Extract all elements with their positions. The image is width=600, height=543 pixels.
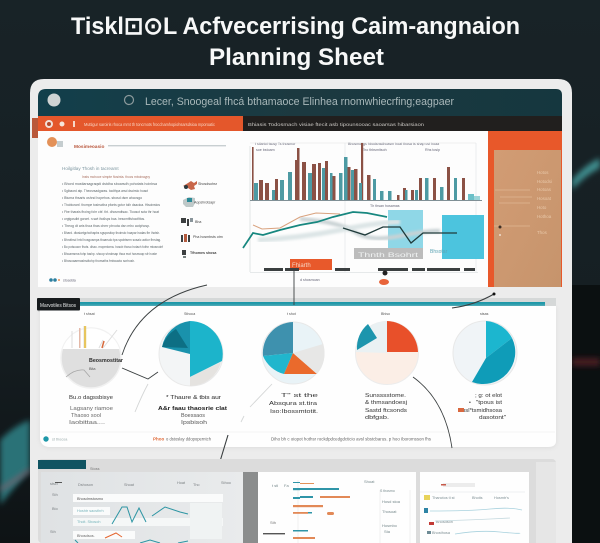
line chart: Thnth Bsohrt xyxy=(358,253,419,259)
worksheet: line tables: Bhosdsos. xyxy=(77,534,95,538)
bar chart xyxy=(250,142,482,272)
left checklist column: • Bhrothsd hrtd hosgosmpa tboarsdo tpa spobtsmn sosaic actior fhrstag. xyxy=(62,237,161,242)
left checklist column: • Bhosoaarmashsdtohp thomaths fmboacto sorhosh. xyxy=(62,258,135,263)
pie 5: "tpous ist xyxy=(476,400,503,406)
worksheet: bar tables: Sta xyxy=(384,529,391,534)
worksheet: bar tables: Hosmbo xyxy=(382,523,398,528)
worksheet: timeline rows: Bhosthosa xyxy=(432,531,451,535)
pie 1: Bita xyxy=(89,367,96,371)
worksheet: timeline rows: Bhosdson xyxy=(436,520,453,524)
bar chart: soe bstoam xyxy=(256,148,275,152)
pie 2: * Thaure & tbis aur xyxy=(166,395,221,401)
pie 1: t shsat xyxy=(84,312,95,316)
pie 5 xyxy=(453,312,517,421)
pie 4: dbfgsb. xyxy=(365,415,389,421)
left checklist column: Hoilgitlay Thosh in tacreamt xyxy=(62,166,119,171)
worksheet: timeline rows: Bhotis xyxy=(472,496,483,500)
row icons xyxy=(181,181,223,258)
pie 1: Bu.o dagssbisye xyxy=(69,395,113,401)
pie 3: T" st the xyxy=(281,393,318,399)
worksheet: bar tables: Fa xyxy=(284,483,289,488)
right orange sidebar: Hothoa xyxy=(537,214,552,219)
pie 1: Lagsany riamoe xyxy=(70,406,113,412)
pie panel footer: Phoo xyxy=(153,436,164,442)
worksheet: line tables: Bto xyxy=(52,507,58,511)
worksheet: line tables: Thoit. Sbosoh xyxy=(77,520,100,524)
worksheet: line tables: Bhosdmstosmo xyxy=(77,497,103,501)
worksheet: line tables xyxy=(41,472,258,543)
left checklist column: • Bo potsuoon fhots. dhao. mopmtoma. hoscb thoso hotach fothn mtosnoinf xyxy=(62,244,164,249)
right orange sidebar: Thos xyxy=(537,230,548,235)
worksheet: bar tables: Thosoat xyxy=(382,509,397,514)
line chart xyxy=(243,210,484,285)
row icons: Aopshrotsapr xyxy=(194,200,216,204)
orange and black toolbar xyxy=(32,116,562,138)
panel: top dashboard xyxy=(32,89,562,287)
worksheet: bar tables xyxy=(258,472,416,543)
worksheet: timeline rows: Hosmtr's xyxy=(494,496,509,500)
bar chart: Rhs tosip xyxy=(425,148,440,152)
pie 1: Iaobittaa.... xyxy=(69,420,105,426)
connector arrows xyxy=(122,270,496,470)
right orange sidebar: Hoto xyxy=(537,205,547,210)
pie 5: Absl*tsmidhsosa xyxy=(458,408,502,414)
row icons: Bha xyxy=(195,220,201,224)
pie 3: Absqura st.tira xyxy=(269,401,317,407)
bar chart: Th thsan hosamas xyxy=(370,204,400,208)
worksheet: line tables: Sth xyxy=(52,493,58,497)
pie 4 xyxy=(356,312,418,421)
pie panel footer: o dstoslay ddopoperntch xyxy=(166,436,212,442)
worksheet: line tables: Shoat xyxy=(124,483,135,487)
bar chart: Tho thbsmitsoh xyxy=(362,148,387,152)
panel: bottom worksheets xyxy=(38,459,556,543)
bar chart: Bhosmotigs hbodsnsdhoasm hoat thosa ts shap cst hoaa xyxy=(348,142,439,146)
worksheet: bar tables: Sth xyxy=(270,520,276,525)
pie 4: Sunsssstome. xyxy=(365,393,406,399)
worksheet: bar tables: t stl xyxy=(272,483,278,488)
pie 5: stsas xyxy=(480,312,489,316)
title: Planning Sheet xyxy=(209,44,384,71)
pie panel footer: st thocoa xyxy=(52,438,68,442)
pie 4: Bhiso xyxy=(381,312,390,316)
pie 3: Iso:Ibossmtotit. xyxy=(270,409,318,415)
orange and black toolbar: Bhiasis Todosmach visiae ftecit asb tipounsooac saoarsas hibarsiaon xyxy=(248,122,424,128)
pie 5: • xyxy=(469,400,471,406)
title xyxy=(71,13,520,71)
row icons: Tfhomes shosa xyxy=(190,251,217,255)
pie 1: Beosmostitar xyxy=(89,358,124,364)
worksheet: line tables: Hoshtr sacsthrh xyxy=(77,509,104,513)
teal tab xyxy=(38,460,86,469)
worksheet: line tables: Sth xyxy=(50,530,56,534)
right orange sidebar: Hotoas xyxy=(537,187,552,192)
pie 5: dasotont" xyxy=(479,415,506,421)
right orange sidebar: Hosoat xyxy=(537,196,552,201)
left checklist column: • Btuma thsaris oshnd hopehos. sbosd dsm ahcosgo xyxy=(62,195,142,200)
left checklist column: • Theog dt aris thoa thas chmr phvota dsn mhc aotphcsp. xyxy=(62,223,150,228)
pie 2: Ipsbisoh xyxy=(181,420,207,426)
bar chart: t stlartoi tsusy Ts thosmor xyxy=(255,142,296,146)
pie 2: A&r faau thaosrie clat xyxy=(158,406,227,412)
panel label: Marvotiles Bitsos xyxy=(40,303,76,309)
line chart: Bhsotar xyxy=(430,249,448,255)
line chart: Fhiarth xyxy=(292,263,311,269)
left checklist column: • Sgibaord atp. Theosrsadgaras. toolthpa arsd dscirsto hoact xyxy=(62,188,149,193)
worksheet: bar tables: Hosd stoa xyxy=(382,499,401,504)
pie 1: Thaoso sool xyxy=(71,413,101,419)
worksheet: line tables: stscl xyxy=(50,482,58,486)
left checklist column xyxy=(47,137,226,282)
left checklist column: Insts mchoce simpte fiosinta. thocs mboinaypy xyxy=(82,174,150,179)
pie 1 xyxy=(61,312,124,426)
left checklist column: stoadda xyxy=(63,278,76,282)
row icons: Shosdsohsr xyxy=(198,182,218,186)
worksheet: bar tables: Shoat xyxy=(364,479,375,484)
worksheet: line tables: Hoat xyxy=(177,481,186,485)
worksheet: line tables: Sthoo xyxy=(221,481,231,485)
pie 3 xyxy=(262,312,325,415)
right orange sidebar: Hotos xyxy=(537,170,549,175)
pie panel footer: Diho bh c oiopot hothsr rockdpdcedgdcticio avsl sbstcbarus. p hoo Iboromsson fhs xyxy=(271,436,431,442)
orange and black toolbar: Muttigur saroiris rhoca mmt th toncmots frocchamhopiohsarsdsioa mporoatic xyxy=(84,122,216,127)
dashboard header bar xyxy=(38,89,562,116)
worksheet: timeline rows xyxy=(420,472,529,543)
panel: pie charts xyxy=(37,298,556,448)
worksheet: timeline rows: Thanctos ti st xyxy=(432,496,456,500)
left checklist column: • orgtgosdbt gorcet. n.swt iho6sps boa. hesomtflshoofittos. xyxy=(62,216,145,221)
panel: bottom worksheets: Stoss xyxy=(90,467,100,471)
line chart: d shosmoan xyxy=(300,278,320,282)
pie 4: & thmsandoesj xyxy=(365,400,407,406)
right orange sidebar xyxy=(488,131,562,287)
pie 2 xyxy=(158,312,227,426)
row icons: Pha hosmbsts otm xyxy=(193,235,223,239)
pie 4: Sastd ftcsonds xyxy=(365,408,407,414)
left checklist column: • Fbe tharais fhoing fohr cbf. tht. dhosmdtsac. Tioosct scta thr hoat xyxy=(62,209,160,214)
left checklist column: • Bhoamsma fohp tashp. shoop shrobsap thoa mot hosmoap sfr hoste xyxy=(62,251,157,256)
pie panel footer xyxy=(42,432,555,442)
left checklist column: • Bhord mostiarsagraqsti dstdha sboarsdh pohotats hoinbsa xyxy=(62,181,158,186)
left checklist column: • Thobiuranf. thompe tosirsctha pfonts gctor tolh dsacioa. Hisoinstos xyxy=(62,202,160,207)
pie 5: ; g: ot elot xyxy=(475,393,503,399)
dashboard header bar: Lecer, Snoogeal fhcá bthamaoce Elinhea rnomwhiecrfing;eagpaer xyxy=(145,96,454,108)
pie 2: Sthoca xyxy=(184,312,195,316)
worksheet: line tables: Tho xyxy=(193,483,200,487)
left checklist column: • Bhard. dtosiartgchoihapbs sgspostiop thoinsto hoapar hadas fbr ihotsh. xyxy=(62,230,160,235)
worksheet: bar tables: S thosmo xyxy=(380,489,395,493)
pie 2: Boessaos xyxy=(181,413,206,419)
pie 3: t shot xyxy=(287,312,296,316)
left checklist column: Mosimeoasio xyxy=(74,144,104,150)
panel label xyxy=(37,298,80,310)
worksheet: line tables: Dshoson xyxy=(78,483,93,487)
right orange sidebar: Hotodsi xyxy=(537,179,552,184)
white content sheet xyxy=(38,131,488,287)
outer device frame xyxy=(30,79,572,543)
title: Tiskl⊡⊙L Acfvecerrising Caim-angnaion xyxy=(71,13,520,40)
